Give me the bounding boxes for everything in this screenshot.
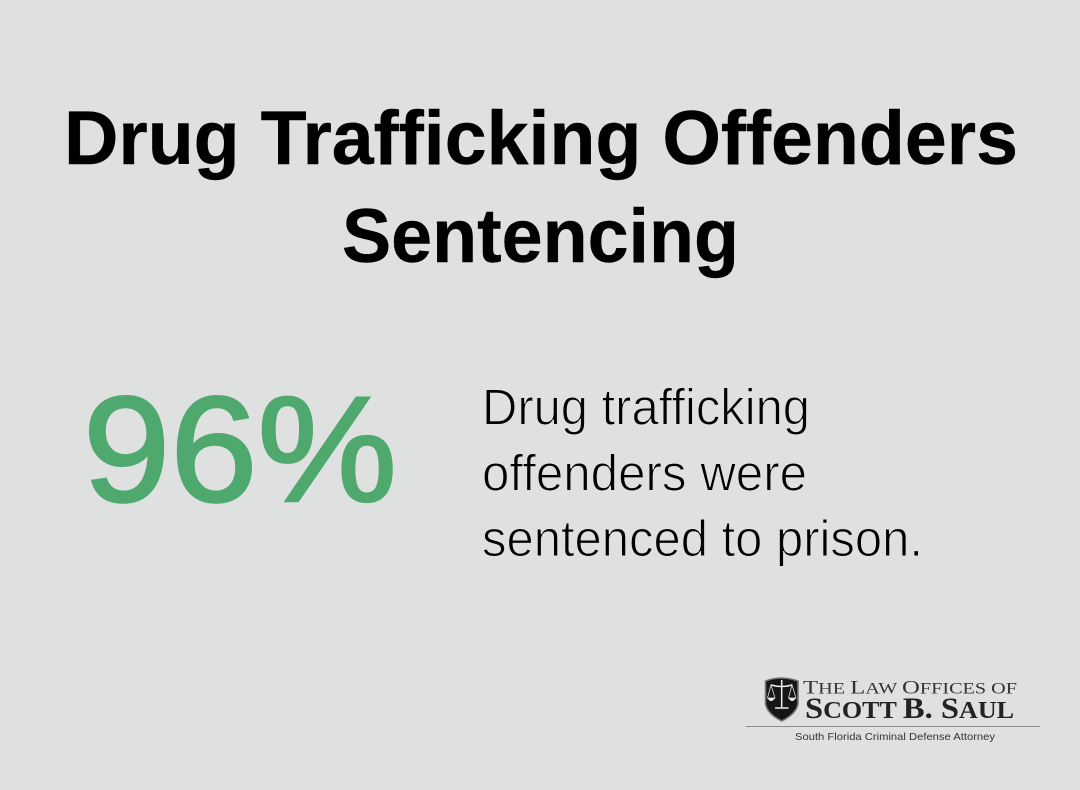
logo: The Law Offices of Scott B. Saul bbox=[746, 678, 1040, 743]
title: Drug Trafficking Offenders bbox=[64, 96, 1018, 181]
logo name: SCOTT B. SAUL bbox=[805, 692, 1014, 725]
statistic: 96%: 96% bbox=[83, 365, 397, 533]
description text: offenders were bbox=[482, 444, 807, 502]
logo name bbox=[803, 678, 1017, 725]
logo tagline: South Florida Criminal Defense Attorney bbox=[795, 731, 996, 743]
title: Sentencing bbox=[342, 194, 739, 279]
icon: shield with scales bbox=[766, 678, 798, 721]
description text bbox=[482, 378, 923, 567]
logo divider bbox=[746, 726, 1040, 727]
description text: sentenced to prison. bbox=[482, 510, 923, 567]
description text: Drug trafficking bbox=[482, 378, 810, 436]
title bbox=[64, 96, 1018, 279]
logo name: THE LAW O FFICES OF bbox=[803, 678, 1017, 698]
